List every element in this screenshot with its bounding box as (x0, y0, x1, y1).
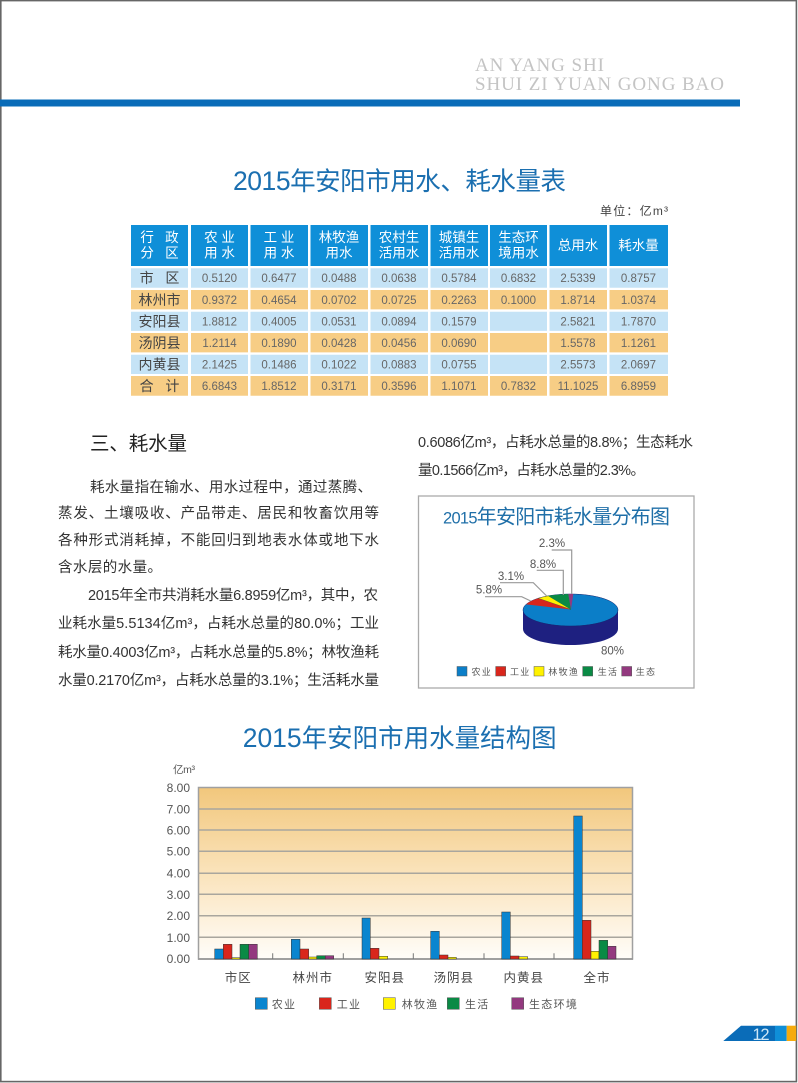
row: 合计 (131, 376, 668, 396)
row: 内黄县: 0.1486 (261, 359, 297, 371)
row: 安阳县: 1.8812 (202, 316, 237, 328)
bar chart legend: 林牧渔 (402, 997, 439, 1011)
left column body text (58, 479, 380, 689)
panel: pie chart (418, 496, 694, 688)
pie leader lines and labels: 2.3% (539, 538, 565, 550)
row: 汤阴县: 1.1261 (621, 338, 656, 350)
bar chart legend: 生态环境 (529, 997, 578, 1011)
y axis labels: 7.00 (167, 802, 190, 816)
y axis labels: 5.00 (167, 844, 190, 858)
table header row: 分 区 (140, 246, 179, 260)
pie body (523, 594, 618, 645)
header text (475, 55, 724, 95)
row: 林州市: 0.0725 (381, 295, 417, 307)
row: 汤阴县: 汤阴县 (138, 335, 180, 351)
pie leader lines and labels: 80% (601, 646, 624, 658)
row: 内黄县: 0.1022 (321, 359, 357, 371)
row: 市区: 0.0638 (381, 273, 417, 285)
bars: 安阳县 (362, 918, 388, 959)
row: 安阳县: 1.7870 (621, 316, 656, 328)
row: 市区: 市 区 (140, 270, 179, 286)
pie panel frame (418, 496, 694, 688)
table header row (131, 225, 668, 266)
table header row: 耗水量 (618, 238, 659, 253)
row: 林州市: 0.0702 (321, 295, 357, 307)
row: 内黄县: 2.0697 (621, 359, 656, 371)
category labels: 内黄县 (503, 971, 544, 985)
row: 合计: 合 计 (140, 378, 179, 394)
row: 合计: 1.8512 (261, 381, 297, 393)
row: 合计: 1.1071 (441, 381, 477, 393)
row: 林州市: 0.2263 (441, 295, 477, 307)
bar chart legend: 工业 (337, 998, 361, 1011)
y axis labels: 3.00 (167, 888, 190, 902)
category labels: 汤阴县 (433, 971, 474, 985)
row: 汤阴县: 0.0690 (441, 338, 477, 350)
row: 汤阴县: 0.0456 (381, 338, 417, 350)
row: 合计: 0.3171 (321, 381, 357, 393)
right column body text: 0.6086亿m³，占耗水总量的8.8%；生态耗水 (418, 434, 694, 451)
title: bar chart: 2015年安阳市用水量结构图 (243, 723, 557, 753)
table header row: 总用水 (558, 238, 599, 253)
paragraph: 2015 consumption: 水量0.2170亿m³，占耗水总量的3.1%；生活耗水量 (58, 672, 379, 689)
row: 合计: 6.8959 (621, 381, 656, 393)
pie legend: 林牧渔 (548, 666, 579, 677)
pie legend: 工业 (510, 667, 531, 677)
right column body text: 量0.1566亿m³，占耗水总量的2.3%。 (418, 462, 645, 479)
y axis labels: 1.00 (167, 931, 190, 945)
row: 汤阴县: 1.5578 (560, 338, 596, 350)
y axis labels: 6.00 (167, 824, 190, 838)
chart unit: 亿m³ (173, 763, 196, 776)
bar chart legend: 农业 (272, 997, 296, 1011)
bar chart (167, 763, 633, 1011)
row: 内黄县: 2.5573 (560, 359, 596, 371)
pie leader lines and labels: 8.8% (530, 559, 556, 571)
paragraph: definition: 耗水量指在输水、用水过程中，通过蒸腾、 (90, 479, 372, 496)
table header row: 生态环 (498, 230, 539, 245)
row: 市区 (131, 268, 668, 288)
header blue bar (0, 100, 740, 106)
unit label: 单位：亿m³ (600, 203, 668, 218)
paragraph: definition: 含水层的水量。 (58, 559, 162, 576)
title: water use table: 2015年安阳市用水、耗水量表 (233, 166, 566, 196)
row: 林州市: 林州市 (138, 292, 180, 308)
y axis labels: 2.00 (167, 909, 190, 923)
row: 市区: 0.6477 (261, 273, 297, 285)
bar chart legend (255, 997, 578, 1011)
table header row: 用 水 (264, 246, 295, 260)
pie legend (457, 666, 656, 677)
row: 市区: 0.0488 (321, 273, 357, 285)
paragraph: definition (58, 479, 380, 576)
section heading: 三、耗水量 (90, 433, 187, 455)
row: 市区: 2.5339 (560, 273, 596, 285)
table header row: 用水 (326, 246, 353, 260)
table header row: 活用水 (379, 246, 420, 260)
row: 内黄县: 0.0883 (381, 359, 417, 371)
table header row: 行 政 (140, 230, 179, 245)
header text: SHUI ZI YUAN GONG BAO (475, 74, 724, 95)
bars: 内黄县 (502, 912, 528, 959)
row: 林州市 (131, 290, 668, 309)
row: 内黄县: 0.0755 (441, 359, 477, 371)
row: 林州市: 1.8714 (560, 295, 596, 307)
right column body text (418, 434, 694, 479)
paragraph: 2015 consumption: 耗水量0.4003亿m³，占耗水总量的5.8%；林牧渔耗 (58, 644, 380, 661)
header text: AN YANG SHI (475, 55, 604, 76)
bars: 全市 (574, 816, 616, 959)
table header row: 城镇生 (439, 230, 479, 245)
page number: 12 (752, 1026, 770, 1044)
row: 市区: 0.6832 (501, 273, 536, 285)
pie title: 2015年安阳市耗水量分布图 (443, 506, 670, 528)
row: 林州市: 0.1000 (501, 295, 536, 307)
plot area (198, 788, 633, 959)
water use table (131, 225, 668, 396)
y axis labels: 0.00 (167, 952, 190, 966)
row: 汤阴县 (131, 333, 668, 352)
row: 林州市: 0.4654 (261, 295, 297, 307)
row: 市区: 0.5120 (202, 273, 237, 285)
bar chart legend: 生活 (465, 997, 490, 1011)
row: 内黄县: 2.1425 (202, 359, 237, 371)
row: 合计: 0.3596 (381, 381, 417, 393)
category labels (225, 970, 611, 985)
paragraph: definition: 蒸发、土壤吸收、产品带走、居民和牧畜饮用等 (58, 504, 379, 522)
row: 安阳县: 0.0531 (321, 316, 357, 328)
y axis labels: 8.00 (167, 781, 190, 795)
pie leader lines and labels (476, 538, 624, 658)
row: 汤阴县: 0.1890 (261, 338, 297, 350)
category labels: 市区 (225, 970, 252, 985)
table header row: 用 水 (204, 246, 235, 260)
row: 合计: 0.7832 (501, 381, 536, 393)
pie leader lines and labels: 5.8% (476, 584, 502, 596)
slice: forestry (538, 596, 571, 610)
pie legend: 生态 (636, 666, 656, 677)
row: 内黄县: 内黄县 (138, 356, 180, 372)
row: 安阳县: 0.4005 (261, 316, 297, 328)
row: 汤阴县: 0.0428 (321, 338, 357, 350)
slice: domestic (548, 594, 571, 610)
slice: industry (526, 598, 571, 610)
table header row: 活用水 (439, 246, 480, 260)
category labels: 全市 (583, 970, 611, 985)
row: 合计: 6.6843 (202, 381, 237, 393)
row: 安阳县: 0.0894 (381, 316, 417, 328)
category labels: 安阳县 (365, 970, 405, 985)
table header row: 农 业 (204, 230, 235, 245)
row: 市区: 0.8757 (621, 273, 656, 285)
y axis labels (167, 781, 190, 966)
slice: ecology (568, 594, 573, 610)
pie legend: 农业 (472, 666, 492, 677)
pie leader lines and labels: 3.1% (498, 571, 524, 583)
category labels: 林州市 (293, 970, 333, 985)
y axis labels: 4.00 (167, 866, 190, 880)
row: 汤阴县: 1.2114 (202, 338, 237, 350)
paragraph: 2015 consumption (58, 586, 380, 689)
paragraph: definition: 各种形式消耗掉，不能回归到地表水体或地下水 (58, 532, 380, 549)
table header row: 林牧渔 (319, 230, 359, 245)
table header row: 工 业 (264, 230, 294, 245)
row: 安阳县: 0.1579 (441, 316, 477, 328)
row: 安阳县 (131, 312, 668, 331)
row: 安阳县: 2.5821 (560, 316, 596, 328)
page number tab (723, 1026, 796, 1044)
table header row: 农村生 (379, 230, 419, 245)
row: 合计: 11.1025 (558, 381, 598, 393)
row: 安阳县: 安阳县 (138, 313, 180, 329)
bars: 汤阴县 (431, 931, 456, 959)
paragraph: 2015 consumption: 2015年全市共消耗水量6.8959亿m³，其中，农 (88, 586, 378, 604)
row: 市区: 0.5784 (441, 273, 477, 285)
table header row: 境用水 (498, 246, 539, 260)
bars: 林州市 (291, 939, 334, 959)
paragraph: 2015 consumption: 业耗水量5.5134亿m³，占耗水总量的80.0%；工业 (58, 615, 379, 632)
page header (0, 55, 740, 106)
row: 内黄县 (131, 355, 668, 374)
row: 林州市: 1.0374 (621, 295, 657, 307)
pie legend: 生活 (598, 666, 618, 677)
bars: 市区 (215, 944, 257, 959)
row: 林州市: 0.9372 (202, 295, 237, 307)
